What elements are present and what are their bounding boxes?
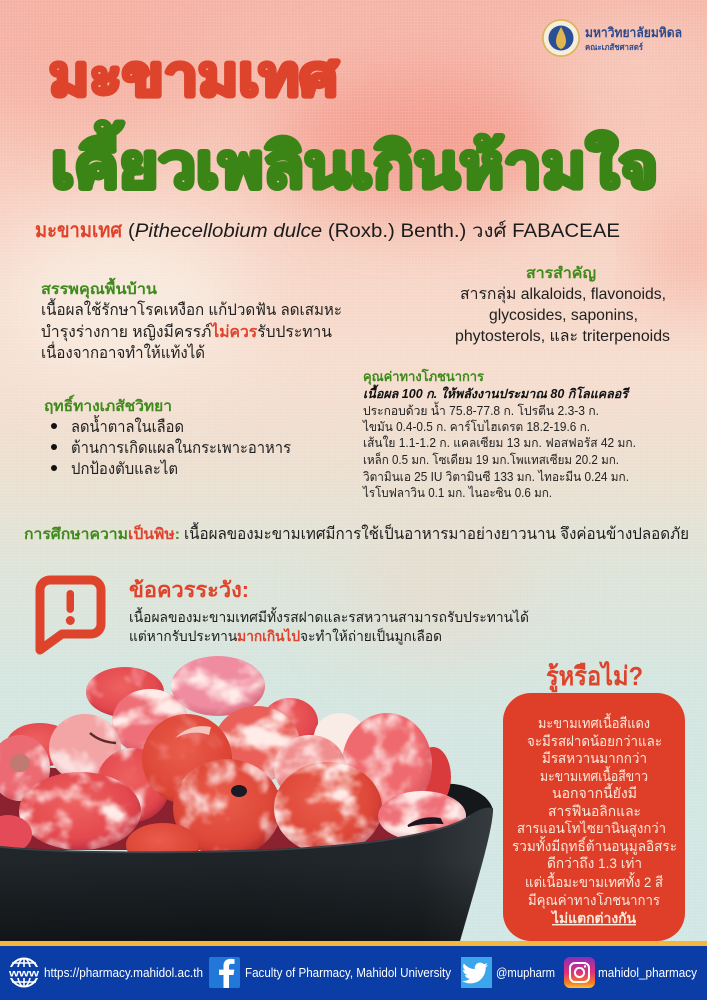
panel: did you know: รวมทั้งมีฤทธิ์ต้านอนุมูลอิสระ [512,836,677,855]
callout: caution: เนื้อผลของมะขามเทศมีทั้งรสฝาดและรสหวานสามารถรับประทานได้ [129,607,529,625]
panel: nutrition: ประกอบด้วย น้ำ 75.8-77.8 ก. โปรตีน 2.3-3 ก. [363,401,599,418]
panel: did you know: สารฟีนอลิกและ [548,803,641,819]
panel: did you know: มะขามเทศเนื้อสีขาว [540,766,648,784]
panel: did you know: จะมีรสฝาดน้อยกว่าและ [527,733,662,749]
scientific name: (Pithecellobium dulce (Roxb.) Benth.) วงศ์ FABACEAE [128,220,620,242]
panel: pharmacological effects [44,394,291,478]
panel: did you know: ดีกว่าถึง 1.3 เท่า [547,855,642,871]
twitter handle: @mupharm [496,965,555,980]
panel: pharmacological effects: ฤทธิ์ทางเภสัชวิทยา [44,394,172,415]
toxicity study statement: การศึกษาความ เป็นพิษ: [24,524,180,543]
callout: caution [129,578,529,645]
photo: bowl of red pithecellobium fruit [0,656,493,941]
toxicity study statement: เนื้อผลของมะขามเทศมีการใช้เป็นอาหารมาอย่างยาวนาน จึงค่อนข้างปลอดภัย [184,522,689,543]
panel: nutrition: ไขมัน 0.4-0.5 ก. คาร์โบไฮเดรต 18.2-19.6 ก. [362,419,590,434]
panel: did you know: มะขามเทศเนื้อสีแดง [538,713,650,731]
panel: folk properties [41,277,342,362]
panel: nutrition: คุณค่าทางโภชนาการ [363,368,484,385]
panel: pharmacological effects: ลดน้ำตาลในเลือด [71,415,184,436]
panel: key compounds: สารสำคัญ [526,265,596,282]
panel: nutrition: เหล็ก 0.5 มก. โซเดียม 19 มก.โพแทสเซียม 20.2 มก. [363,452,619,467]
instagram handle: mahidol_pharmacy [598,965,697,980]
panel: nutrition [362,368,636,500]
icon: website globe [8,958,40,987]
scientific name: มะขามเทศ [35,220,123,242]
icon: warning speech bubble [40,580,101,650]
panel: pharmacological effects: ต้านการเกิดแผลในกระเพาะอาหาร [71,438,291,457]
panel: nutrition: ไรโบฟลาวิน 0.1 มก. ไนอะซิน 0.6 มก. [362,485,552,500]
panel: nutrition: เนื้อผล 100 ก. ให้พลังงานประมาณ 80 กิโลแคลอรี [363,384,630,401]
panel: key compounds: glycosides, saponins, [489,307,638,324]
panel: pharmacological effects: ปกป้องตับและไต [71,459,178,478]
heading: did you know: รู้หรือไม่? [546,660,643,693]
toxicity study statement [24,522,689,543]
footer bar [0,941,707,1000]
icon: facebook [209,957,240,988]
panel: key compounds: สารกลุ่ม alkaloids, flavonoids, [460,286,666,304]
callout: caution: ข้อควรระวัง: [129,578,249,602]
callout: caution: แต่หากรับประทานมากเกินไปจะทำให้ถ่ายเป็นมูกเลือด [129,627,442,645]
panel: did you know: มีคุณค่าทางโภชนาการ [528,892,660,909]
panel: folk properties: เนื่องจากอาจทำให้แท้งได้ [41,341,205,362]
icon: website globe: www [8,968,40,980]
website url: https://pharmacy.mahidol.ac.th [44,965,203,980]
logo: Mahidol University: คณะเภสัชศาสตร์ [585,42,643,52]
panel: folk properties: เนื้อผลใช้รักษาโรคเหงือก แก้ปวดฟัน ลดเสมหะ [41,298,342,319]
panel: did you know: สารแอนโทไซยานินสูงกว่า [517,820,666,837]
facebook name: Faculty of Pharmacy, Mahidol University [245,965,451,980]
panel: key compounds: phytosterols, และ triterpenoids [455,328,670,345]
panel: folk properties: สรรพคุณพื้นบ้าน [41,277,158,299]
panel: did you know: นอกจากนี้ยังมี [552,783,637,801]
panel: did you know: ไม่แตกต่างกัน [550,909,636,926]
panel: key compounds [455,265,670,345]
title line 1: มะขามเทศ [49,44,340,107]
panel: nutrition: วิตามินเอ 25 IU วิตามินซี 133 มก. ไทอะมีน 0.24 มก. [363,470,629,484]
icon: twitter [461,957,492,988]
panel: folk properties: บำรุงร่างกาย หญิงมีครรภ์ไม่ควรรับประทาน [41,322,332,342]
panel: nutrition: เส้นใย 1.1-1.2 ก. แคลเซียม 13 มก. ฟอสฟอรัส 42 มก. [363,436,636,450]
logo: Mahidol University: มหาวิทยาลัยมหิดล [585,25,682,40]
icon: instagram [564,957,595,988]
panel: did you know: มีรสหวานมากกว่า [542,750,647,766]
title line 2: เคี้ยวเพลินเกินห้ามใจ [51,121,658,200]
panel: did you know [503,693,685,941]
logo: Mahidol University [542,19,682,57]
panel: did you know: แต่เนื้อมะขามเทศทั้ง 2 สี [525,872,663,890]
